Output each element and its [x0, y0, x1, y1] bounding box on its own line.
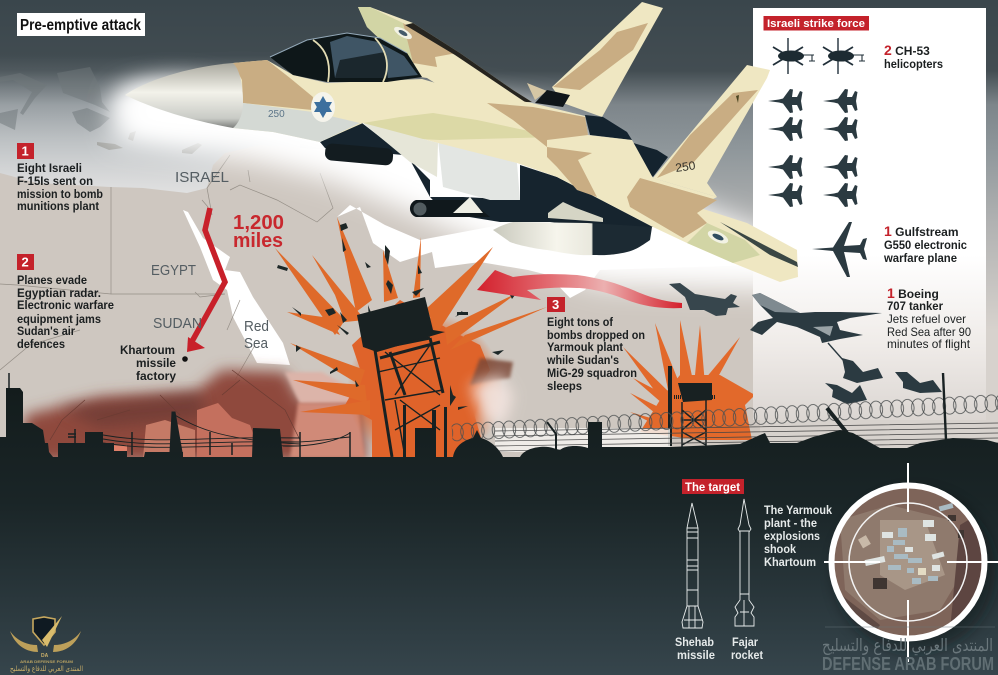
wing shading — [363, 113, 557, 140]
white glow behind plane — [110, 85, 790, 290]
camouflage — [233, 60, 717, 238]
text: Boeing tanker — [887, 285, 971, 351]
radome — [125, 63, 243, 128]
icon: refuelling jet 3 — [825, 383, 867, 404]
step 2: defences — [17, 337, 65, 351]
utility wires and poles — [9, 373, 350, 457]
Persian Gulf and Arabian Sea — [337, 205, 607, 298]
dark underside — [410, 160, 653, 228]
step 1: Eight Israeli — [17, 161, 82, 175]
missile labels: rocket — [731, 648, 763, 662]
far wing — [358, 7, 532, 105]
map labels: Sea — [244, 335, 269, 352]
icon: small jet at arrow end — [669, 283, 740, 316]
Khartoum label — [120, 343, 188, 383]
step 3: Eight tons of — [547, 315, 614, 329]
map labels: EGYPT — [151, 262, 196, 279]
text: Gulfstream — [883, 223, 967, 265]
Yarmouk plant text: shook — [764, 542, 796, 556]
step 2: Electronic warfare — [17, 298, 114, 312]
Yarmouk plant text — [764, 503, 832, 569]
canopy — [270, 33, 422, 82]
panel heading: Israeli strike force — [767, 18, 865, 30]
nose underside — [233, 103, 360, 142]
Yarmouk plant text: explosions — [764, 529, 820, 543]
missile labels: Shehab — [675, 635, 714, 649]
engine nacelles — [585, 115, 668, 177]
route arrow: 1,200 miles — [187, 208, 225, 352]
nose glow — [113, 80, 237, 132]
icon: Boeing 707 tanker — [750, 293, 942, 404]
roundel — [311, 92, 335, 122]
tail fin one — [527, 2, 663, 117]
text: Gulfstream: warfare plane — [883, 251, 957, 265]
title — [17, 13, 145, 36]
fuel tank — [493, 222, 652, 255]
step 3: 3 — [552, 297, 559, 312]
step 3 — [546, 297, 645, 393]
large explosion — [275, 217, 547, 468]
pale sea gradient on the left — [0, 55, 300, 195]
step 1: 1 — [22, 144, 29, 158]
text: Boeing tanker: minutes of flight — [887, 337, 971, 351]
text: Boeing tanker: Jets refuel over — [887, 312, 966, 326]
target satellite photo with crosshair — [824, 463, 998, 662]
missile — [410, 197, 603, 222]
tail fin two — [653, 65, 770, 197]
icon: F-15 fighter jet: 250 — [268, 109, 285, 120]
lower intake lip — [363, 123, 438, 177]
icon: Fajar rocket — [735, 499, 754, 626]
step 3: Yarmouk plant — [547, 340, 623, 354]
logo: Arab Defense Forum: DA — [41, 653, 49, 659]
step 1: munitions plant — [17, 199, 99, 213]
map of Middle East — [0, 131, 760, 460]
Yarmouk plant text: plant - the — [764, 516, 817, 530]
logo: Arab Defense Forum: ARAB DEFENSE FORUM — [20, 659, 74, 664]
step 2: Egyptian radar. — [17, 286, 101, 300]
logo: Arab Defense Forum — [10, 616, 83, 673]
dark bay beneath nose — [320, 123, 403, 155]
map labels: ISRAEL — [175, 169, 229, 186]
step 2: equipment jams — [17, 312, 101, 326]
Red Sea — [183, 210, 290, 365]
text: Boeing tanker: 707 tanker — [887, 299, 943, 313]
red glow over map bottom — [22, 370, 365, 462]
strike force panel — [753, 8, 986, 420]
barbed wire fence — [451, 373, 998, 452]
distance label — [233, 212, 284, 252]
strike arrow — [477, 270, 682, 308]
map labels: Red — [244, 318, 269, 335]
Yarmouk plant text: Khartoum — [764, 555, 816, 569]
step 2: Sudan's air — [17, 324, 75, 338]
Khartoum label: missile — [136, 356, 176, 370]
pod — [324, 143, 394, 166]
step 2: Planes evade — [17, 273, 87, 287]
map labels: SUDAN — [153, 315, 202, 332]
text: helicopters: helicopters — [884, 57, 943, 71]
missile labels: Fajar — [732, 635, 758, 649]
Mediterranean land silhouettes — [0, 67, 110, 132]
fuselage — [233, 60, 798, 282]
stabiliser upper — [697, 207, 797, 252]
tail fin two: 250 — [674, 158, 697, 175]
stabiliser green — [687, 223, 760, 263]
Khartoum label: Khartoum — [120, 343, 175, 357]
Yarmouk plant text: The Yarmouk — [764, 503, 832, 517]
step 3: bombs dropped on — [547, 328, 645, 342]
step 2 — [17, 254, 114, 351]
logo: Arab Defense Forum: المنتدى العربي للدفاع والتسليح — [10, 664, 83, 673]
Khartoum label: factory — [136, 369, 176, 383]
icon: Gulfstream G550 — [812, 222, 867, 277]
title: Pre-emptive attack — [20, 17, 141, 34]
ground silhouette — [0, 388, 998, 675]
step 1: F-15Is sent on — [17, 174, 93, 188]
icon: F-15 fighter jet — [125, 2, 798, 282]
step 1 — [17, 143, 103, 213]
icon: Shehab missile — [682, 503, 703, 628]
distance label: miles — [233, 230, 283, 252]
distance label: 1,200 — [233, 212, 284, 234]
map labels — [151, 169, 269, 352]
watermark: Defense Arab Forum — [822, 627, 995, 674]
missile labels: missile — [677, 648, 715, 662]
text: Boeing tanker: 1 Boeing — [887, 285, 939, 301]
target heading: The target — [685, 482, 740, 494]
small explosion and tower — [623, 320, 755, 447]
text: Gulfstream: 1 Gulfstream — [884, 223, 958, 239]
text: Gulfstream: G550 electronic — [884, 238, 967, 252]
text: Boeing tanker: Red Sea after 90 — [887, 325, 971, 339]
icon: F-15 jets — [768, 89, 858, 207]
icon: helicopters — [773, 38, 865, 74]
text: helicopters — [884, 42, 943, 71]
step 3: while Sudan's — [546, 353, 619, 367]
watchtower silhouette — [357, 297, 447, 457]
icon: refuelling jet 1 — [842, 358, 883, 383]
step 3: sleeps — [547, 379, 582, 393]
step 2: 2 — [22, 254, 29, 270]
step 1: mission to bomb — [17, 187, 103, 201]
icon: refuelling jet 2 — [895, 372, 942, 393]
missile labels — [675, 635, 763, 662]
text: helicopters: 2 CH-53 — [884, 42, 930, 58]
flying debris — [277, 223, 518, 410]
intake panel — [438, 140, 520, 200]
step 3: MiG-29 squadron — [547, 366, 637, 380]
